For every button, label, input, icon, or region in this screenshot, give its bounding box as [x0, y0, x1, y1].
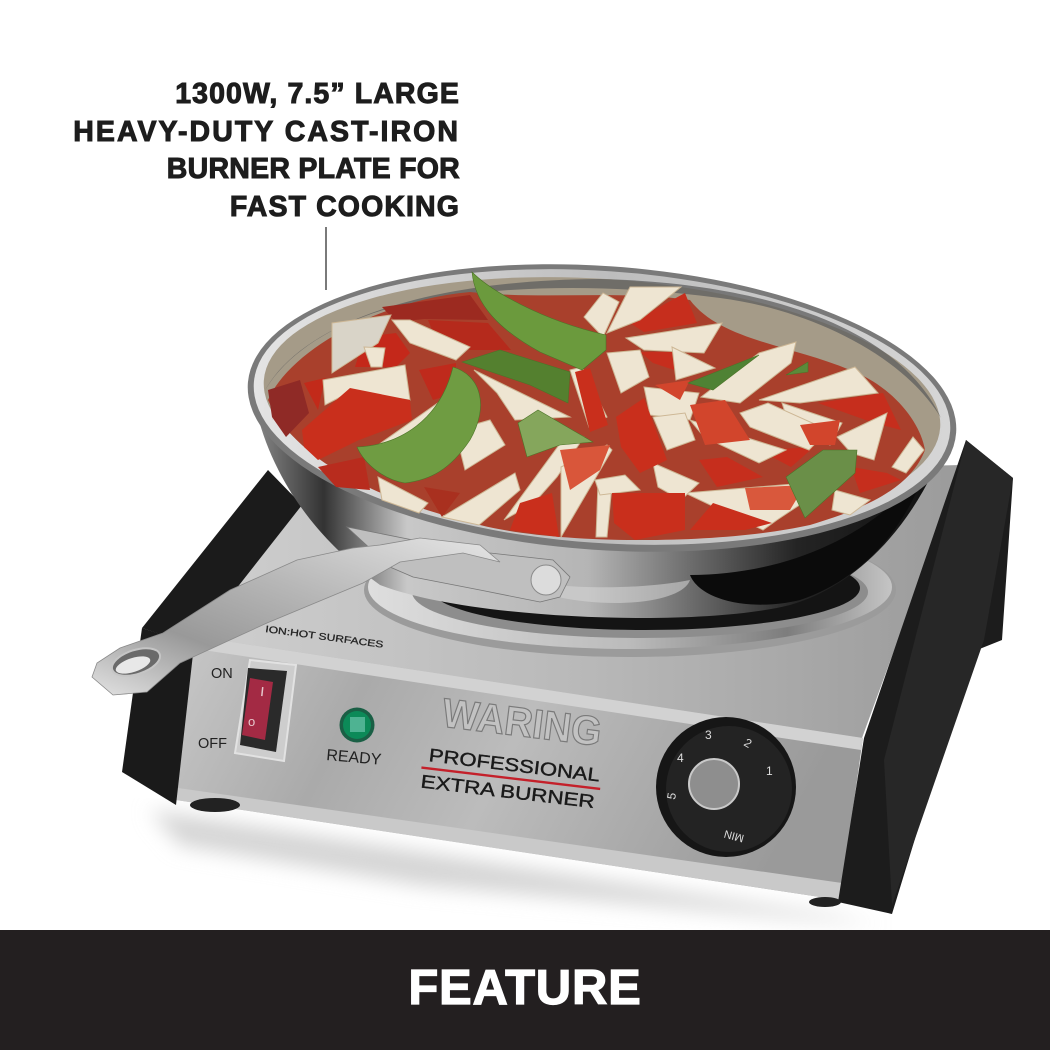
model label: PROFESSIONAL	[428, 744, 601, 785]
on/off switch: o	[248, 714, 255, 729]
temperature dial: 5	[664, 791, 679, 801]
temperature dial: 3	[705, 728, 712, 742]
heading callout text	[73, 78, 460, 223]
caution text: ION:HOT SURFACES	[265, 624, 384, 651]
pan rim and interior	[238, 242, 966, 574]
heading callout text: BURNER PLATE FOR	[167, 153, 460, 185]
on/off switch: OFF	[198, 736, 227, 752]
temperature dial: 4	[677, 751, 684, 765]
feet	[190, 798, 240, 812]
model label: EXTRA BURNER	[420, 770, 596, 812]
ready light	[326, 708, 382, 769]
rear tomatoes	[268, 293, 901, 517]
temperature dial	[656, 717, 796, 857]
frying pan bowl	[254, 400, 950, 618]
black right end cap	[838, 440, 1013, 914]
on/off switch	[198, 660, 296, 761]
temperature dial: 1	[766, 764, 773, 778]
model label	[419, 744, 603, 813]
burner plate	[364, 523, 896, 657]
penne pieces	[323, 287, 924, 537]
cast shadow under burner	[150, 810, 880, 925]
burner body	[122, 440, 1013, 914]
temperature dial: MIN	[723, 827, 745, 844]
brand logo: WARING	[440, 690, 604, 755]
heading callout text: HEAVY-DUTY CAST-IRON	[73, 116, 460, 148]
heading callout text: 1300W, 7.5” LARGE	[175, 78, 460, 110]
callout leader line	[325, 227, 327, 290]
ready light: READY	[326, 747, 382, 769]
footer banner	[0, 930, 1050, 1050]
basil leaves	[357, 272, 857, 518]
temperature dial: 2	[742, 735, 755, 751]
front tomatoes and sauce	[302, 368, 840, 540]
black rear left strip	[142, 470, 302, 645]
top surface	[190, 465, 962, 738]
pasta with tomato sauce	[268, 272, 925, 540]
front steel panel	[176, 636, 863, 900]
heading callout text: FAST COOKING	[230, 191, 460, 223]
footer banner: FEATURE	[408, 961, 642, 1015]
pan handle	[92, 527, 570, 695]
black left end cap	[122, 628, 194, 805]
on/off switch: ON	[211, 666, 233, 682]
